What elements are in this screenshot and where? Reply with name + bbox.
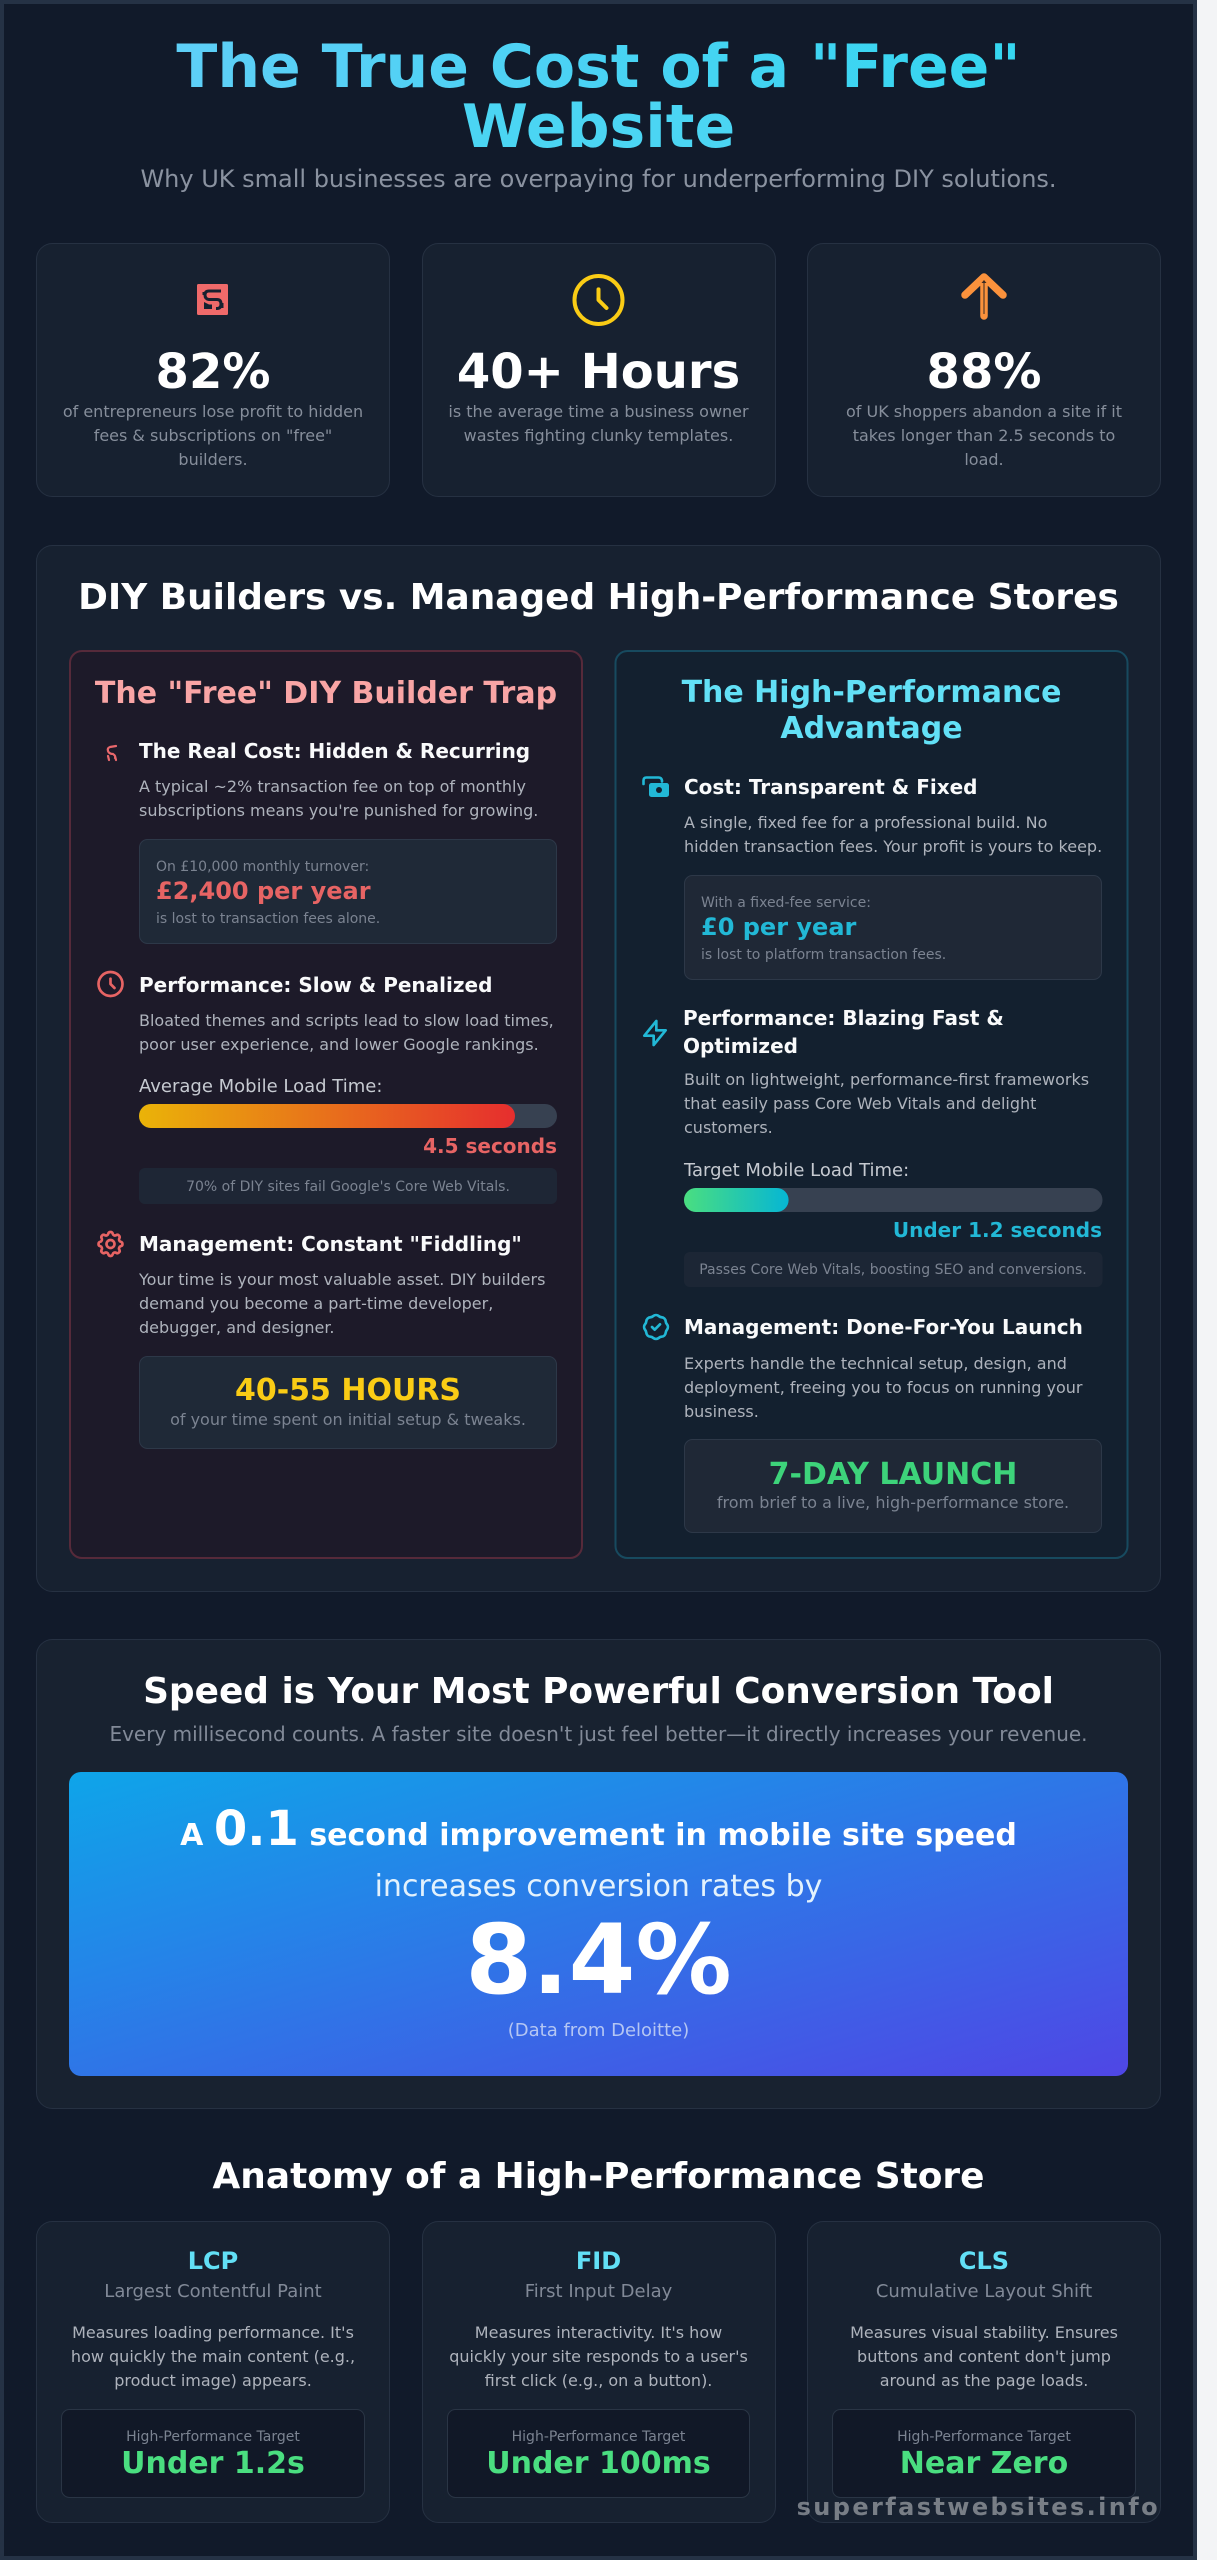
title: The True Cost of a "Free" — [176, 32, 1021, 102]
stat card: 88%: of UK shoppers abandon a site if it — [846, 402, 1122, 421]
metric card: FID: quickly your site responds to a user's — [449, 2347, 748, 2366]
stat card: 40+ Hours — [422, 244, 776, 496]
stat card: 82%: 82% — [156, 344, 270, 400]
metric card: LCP: Measures loading performance. It's — [72, 2323, 354, 2342]
metric card: FID: First Input Delay — [525, 2281, 673, 2302]
item: performance: Under 1.2 seconds — [893, 1218, 1102, 1242]
icon: cash — [644, 778, 669, 797]
panel: comparison — [36, 546, 1160, 1592]
item: performance: poor user experience, and lower Google rankings. — [139, 1035, 539, 1054]
metric card: LCP: product image) appears. — [114, 2371, 312, 2390]
metric card: CLS: Cumulative Layout Shift — [876, 2281, 1092, 2302]
metric card: FID: Measures interactivity. It's how — [475, 2323, 722, 2342]
stat card: 40+ Hours: 40+ Hours — [457, 344, 740, 400]
item: performance: Performance: Slow & Penalized — [139, 973, 492, 997]
item: management: debugger, and designer. — [139, 1318, 335, 1337]
stat card: 88%: takes longer than 2.5 seconds to — [853, 426, 1115, 445]
note: Passes Core Web Vitals, boosting SEO and conversions. — [699, 1262, 1087, 1278]
target box: High-Performance Target — [126, 2429, 300, 2445]
item: cost — [684, 775, 1102, 980]
callout: £0 — [684, 876, 1102, 980]
metric card: FID: FID — [576, 2247, 621, 2275]
watermark: superfastwebsites.info — [797, 2493, 1160, 2521]
item: management: Management: Constant "Fiddling" — [139, 1232, 522, 1256]
callout: 8.4%: 8.4% — [465, 1904, 732, 2016]
item: real cost — [139, 739, 556, 944]
metric card: CLS — [808, 2222, 1160, 2522]
item: management: deployment, freeing you to focus on running your — [684, 1378, 1083, 1397]
item: performance: customers. — [684, 1118, 773, 1137]
item: cost: hidden transaction fees. Your profit is yours to keep. — [684, 837, 1102, 856]
icon: badge check — [644, 1315, 668, 1339]
bar chart: slow load — [139, 1104, 557, 1128]
subtitle: Why UK small businesses are overpaying for underperforming DIY solutions. — [140, 165, 1057, 193]
icon: dollar square — [197, 284, 228, 315]
note — [139, 1168, 557, 1204]
item: performance: Average Mobile Load Time: — [139, 1076, 382, 1097]
stat card: 82%: builders. — [178, 450, 248, 469]
metric card: LCP: Largest Contentful Paint — [104, 2281, 322, 2302]
speed heading: Speed is Your Most Powerful Conversion Tool — [143, 1671, 1054, 1712]
metric card: LCP: how quickly the main content (e.g., — [71, 2347, 355, 2366]
advantage heading: Advantage — [780, 711, 963, 746]
comparison heading: DIY Builders vs. Managed High-Performance Stores — [78, 577, 1119, 618]
stat card: 82% — [36, 244, 390, 496]
item: real cost: A typical ~2% transaction fee on top of monthly — [139, 777, 526, 796]
item: performance: Target Mobile Load Time: — [683, 1160, 909, 1181]
advantage heading: The High-Performance — [682, 675, 1061, 710]
panel: DIY builder trap — [70, 651, 582, 1558]
panel: high-performance advantage — [616, 651, 1128, 1558]
target box: Under 100ms — [486, 2446, 711, 2481]
metric card: FID — [422, 2222, 776, 2522]
stat card: 88%: load. — [964, 450, 1004, 469]
item: management: Experts handle the technical setup, design, and — [684, 1354, 1067, 1373]
bar chart: fast load — [684, 1188, 1102, 1212]
stat card: 88% — [808, 244, 1160, 496]
callout: 7-day launch: from brief to a live, high-performance store. — [717, 1493, 1069, 1512]
item: performance — [139, 973, 557, 1204]
title: Website — [462, 92, 735, 162]
callout: £2,400: On £10,000 monthly turnover: — [156, 859, 369, 875]
callout: £0: With a fixed-fee service: — [701, 895, 871, 911]
item: real cost: The Real Cost: Hidden & Recurring — [139, 739, 530, 763]
item: management: demand you become a part-time developer, — [139, 1294, 493, 1313]
item: cost: A single, fixed fee for a professional build. No — [684, 813, 1047, 832]
icon: bolt — [644, 1021, 666, 1045]
item: performance: Performance: Blazing Fast & — [683, 1006, 1004, 1030]
callout: 8.4% — [69, 1772, 1128, 2076]
icon: clock — [575, 276, 623, 324]
callout: 40-55 hours: 40-55 HOURS — [235, 1373, 461, 1408]
item: management: Your time is your most valuable asset. DIY builders — [138, 1270, 545, 1289]
stat card: 40+ Hours: wastes fighting clunky templates. — [464, 426, 733, 445]
stat card: 82%: fees & subscriptions on "free" — [94, 426, 332, 445]
metric card: FID: first click (e.g., on a button). — [485, 2371, 712, 2390]
callout: 8.4%: increases conversion rates by — [375, 1869, 822, 1904]
metric card: LCP — [36, 2222, 390, 2522]
metric card: CLS: around as the page loads. — [880, 2371, 1088, 2390]
item: management — [138, 1232, 556, 1448]
note — [684, 1252, 1102, 1287]
metric card: CLS: buttons and content don't jump — [857, 2347, 1111, 2366]
metric card: CLS: Measures visual stability. Ensures — [850, 2323, 1118, 2342]
item: cost: Cost: Transparent & Fixed — [684, 775, 978, 799]
target box: Near Zero — [900, 2446, 1068, 2481]
note: 70% of DIY sites fail Google's Core Web Vitals. — [186, 1179, 510, 1195]
item: performance: 4.5 seconds — [423, 1134, 557, 1158]
title — [176, 32, 1021, 162]
callout: £2,400: £2,400 per year — [156, 877, 371, 905]
DIY heading: The "Free" DIY Builder Trap — [95, 676, 557, 711]
callout: 40-55 hours: of your time spent on initial setup & tweaks. — [170, 1410, 526, 1429]
speed subtitle: Every millisecond counts. A faster site doesn't just feel better—it directly increases your revenue. — [109, 1722, 1088, 1746]
target box: Under 1.2s — [121, 2446, 305, 2481]
stat card: 82%: of entrepreneurs lose profit to hidden — [63, 402, 363, 421]
callout: £0: is lost to platform transaction fees. — [701, 947, 946, 963]
icon: gear — [98, 1232, 122, 1256]
callout: 8.4%: A 0.1 second improvement in mobile site speed — [180, 1801, 1017, 1857]
anatomy heading: Anatomy of a High-Performance Store — [213, 2156, 984, 2197]
icon: clock — [98, 972, 122, 996]
item: real cost: subscriptions means you're punished for growing. — [139, 801, 538, 820]
item: management — [684, 1315, 1102, 1532]
target box — [62, 2410, 364, 2498]
panel: speed — [36, 1640, 1160, 2108]
callout: £2,400: is lost to transaction fees alone. — [156, 911, 380, 927]
target box: High-Performance Target — [897, 2429, 1071, 2445]
callout: 7-day launch — [684, 1440, 1102, 1532]
target box — [448, 2410, 750, 2498]
target box: High-Performance Target — [512, 2429, 686, 2445]
callout: 7-day launch: 7-DAY LAUNCH — [769, 1457, 1017, 1492]
item: management: business. — [684, 1402, 759, 1421]
icon: clipped dollar — [108, 746, 116, 760]
callout: 40-55 hours — [140, 1356, 556, 1448]
item: performance: Built on lightweight, performance-first frameworks — [684, 1070, 1089, 1089]
item: performance: that easily pass Core Web Vitals and delight — [684, 1094, 1036, 1113]
target box — [832, 2410, 1136, 2498]
item: management: Management: Done-For-You Launch — [684, 1315, 1083, 1339]
metric card: CLS: CLS — [959, 2247, 1009, 2275]
item: performance — [683, 1006, 1102, 1287]
callout: 8.4%: (Data from Deloitte) — [508, 2020, 689, 2041]
metric card: LCP: LCP — [188, 2247, 238, 2275]
icon: arrow up — [965, 277, 1003, 316]
item: performance: Optimized — [683, 1034, 798, 1058]
callout: £2,400 — [140, 840, 556, 944]
stat card: 40+ Hours: is the average time a business owner — [448, 402, 749, 421]
callout: £0: £0 per year — [701, 913, 857, 941]
item: performance: Bloated themes and scripts lead to slow load times, — [139, 1011, 554, 1030]
stat card: 88%: 88% — [927, 344, 1041, 400]
